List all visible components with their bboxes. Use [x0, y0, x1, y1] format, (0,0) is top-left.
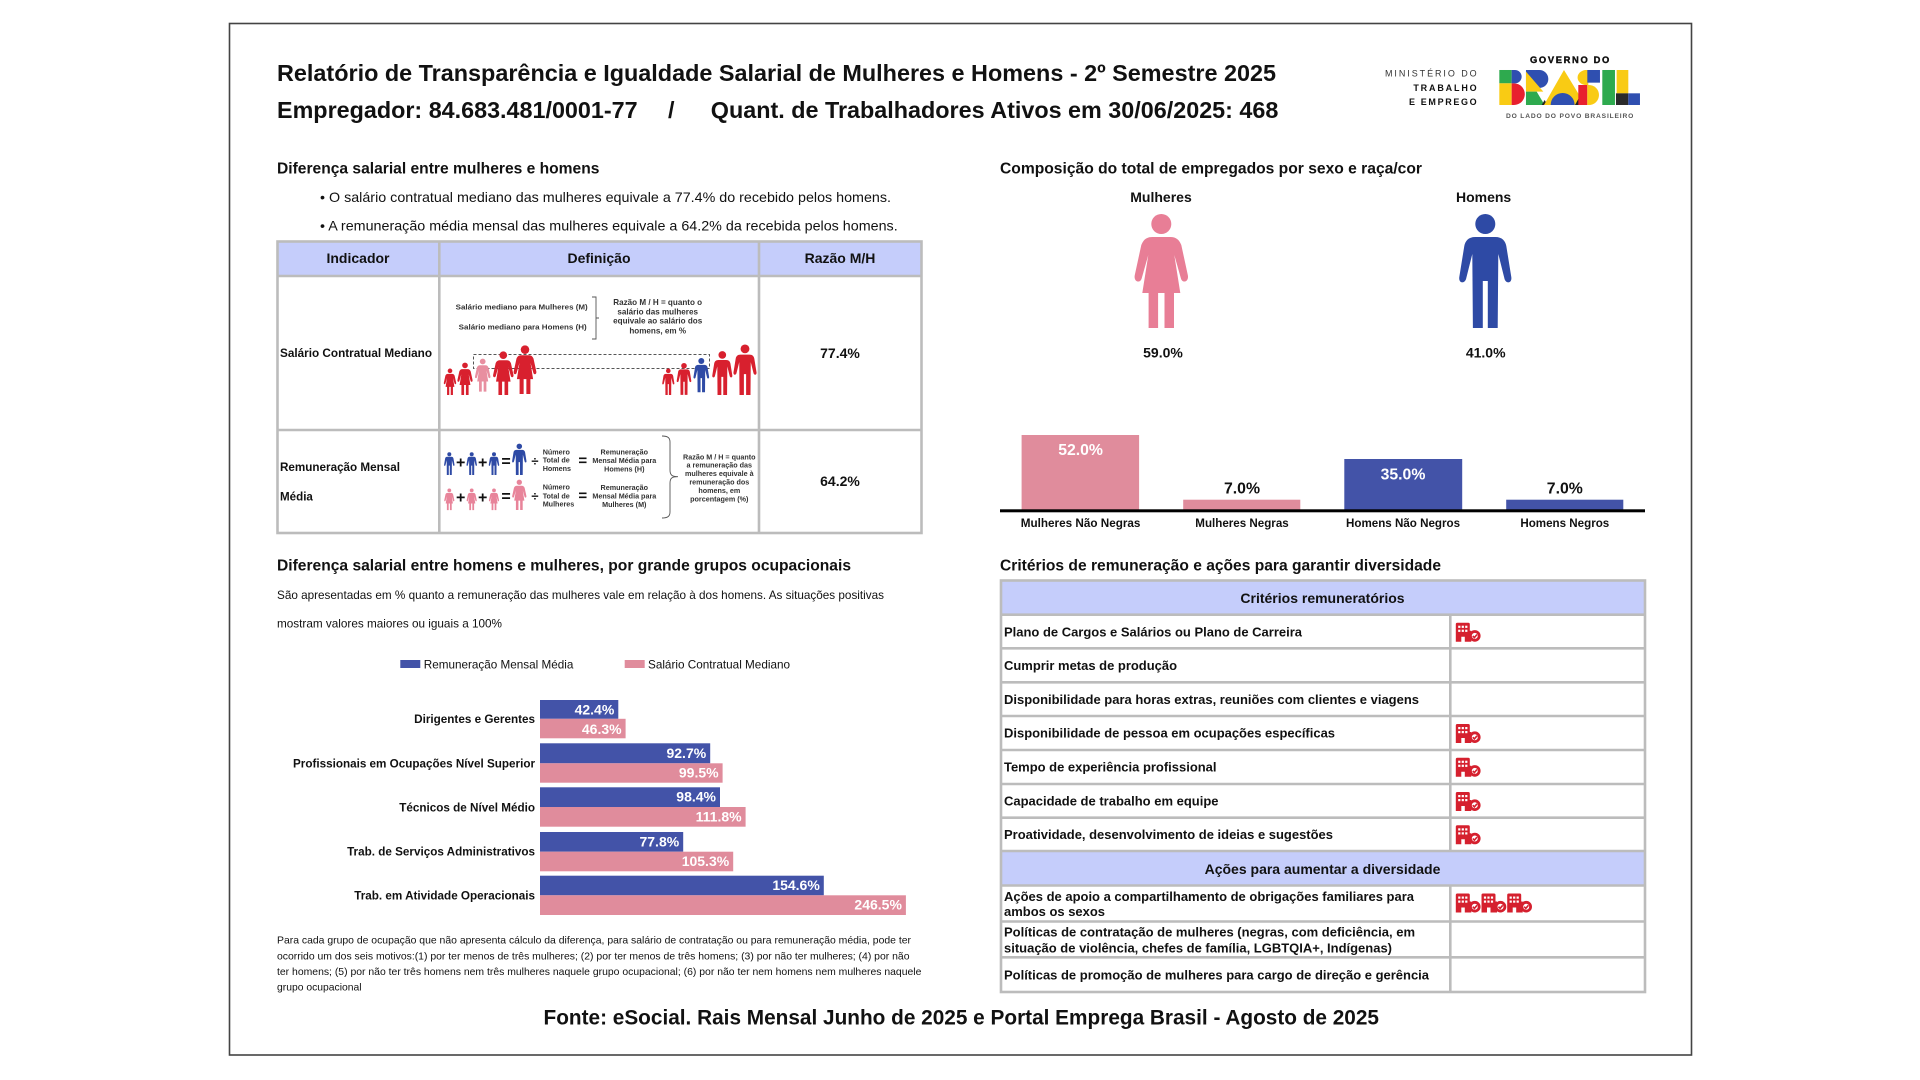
- footer source: Fonte: eSocial. Rais Mensal Junho de 2025 e Portal Emprega Brasil - Agosto de 2025: [544, 1007, 1379, 1030]
- diagram: average pay: Mulheres (M): [602, 500, 647, 509]
- title: Empregador: 84.683.481/0001-77: [277, 97, 638, 123]
- diagram: average pay: homens, em: [698, 486, 740, 495]
- row labels: Média: [280, 490, 313, 504]
- criteria rows: Capacidade de trabalho em equipe: [1004, 793, 1218, 808]
- heading: composition: Composição do total de empregados por sexo e raça/cor: [1000, 160, 1422, 178]
- heading: criteria: Critérios de remuneração e ações para garantir diversidade: [1000, 558, 1441, 574]
- description text: [277, 589, 884, 631]
- label: women: Mulheres: [1130, 189, 1192, 205]
- bar values: 111.8%: [696, 808, 742, 824]
- diagram: average pay: ÷: [531, 454, 539, 468]
- ratio values: 64.2%: [820, 473, 860, 489]
- chart legend: Salário Contratual Mediano: [648, 658, 790, 672]
- table header: Razão M/H: [805, 250, 875, 266]
- action rows: situação de violência, chefes de família, LGBTQIA+, Indígenas): [1004, 941, 1392, 956]
- action icons: company building with check: [1456, 894, 1531, 912]
- diagram: average pay: +: [478, 454, 487, 472]
- diagram: average pay: Remuneração: [601, 483, 649, 492]
- diagram: median salary: Salário mediano para Homens (H): [459, 322, 587, 331]
- bullet text block: • A remuneração média mensal das mulheres equivale a 64.2% da recebida pelos homens.: [320, 218, 898, 234]
- row labels: Salário Contratual Mediano: [280, 347, 432, 360]
- diagram: median salary: [444, 297, 757, 395]
- criteria rows: Disponibilidade de pessoa em ocupações específicas: [1004, 726, 1335, 741]
- bar values: 154.6%: [772, 877, 820, 893]
- table header: actions: Ações para aumentar a diversidade: [1205, 861, 1441, 877]
- panel: occupational groups: [277, 558, 922, 993]
- logo: Ministério do Trabalho e Emprego / Governo do Brasil: DO LADO DO POVO BRASILEIRO: [1506, 113, 1633, 120]
- criteria rows: Disponibilidade para horas extras, reuniões com clientes e viagens: [1004, 692, 1419, 707]
- title: Quant. de Trabalhadores Ativos em 30/06/2025: 468: [711, 97, 1278, 123]
- diagram: average pay: Total de: [543, 456, 570, 465]
- diagram: average pay: Mulheres: [543, 500, 574, 509]
- table header: Indicador: [326, 250, 390, 266]
- diagram: average pay: Número: [543, 483, 570, 492]
- footnote: Para cada grupo de ocupação que não apresenta cálculo da diferença, para salário de contratação ou para remuneração média, pode ter: [277, 936, 912, 947]
- description text: São apresentadas em % quanto a remuneração das mulheres vale em relação à dos homens. As situações positivas: [277, 589, 884, 602]
- diagram: average pay: +: [456, 454, 465, 472]
- action rows: Ações de apoio a compartilhamento de obrigações familiares para: [1004, 889, 1415, 904]
- criteria rows: Tempo de experiência profissional: [1004, 759, 1216, 774]
- value: women share: 59.0%: [1143, 345, 1183, 361]
- diagram: median salary: Razão M / H = quanto o: [613, 298, 702, 307]
- diagram: average pay: mulheres equivale à: [685, 469, 755, 478]
- bar values: 246.5%: [854, 897, 902, 913]
- logo: Ministério do Trabalho e Emprego / Governo do Brasil: GOVERNO DO: [1530, 55, 1609, 65]
- criteria rows: [1004, 624, 1419, 842]
- row labels: [280, 347, 432, 504]
- bar values: 98.4%: [676, 788, 717, 804]
- diagram: average pay: [444, 436, 756, 518]
- column chart: race and sex: [1000, 435, 1645, 530]
- icon: man: [1459, 214, 1511, 328]
- action rows: Políticas de promoção de mulheres para cargo de direção e gerência: [1004, 968, 1430, 983]
- title: [277, 60, 1278, 123]
- diagram: average pay: remuneração dos: [689, 478, 749, 487]
- bar values: 105.3%: [682, 853, 730, 869]
- panel: composition by sex and race: [1000, 160, 1645, 530]
- criteria rows: Proatividade, desenvolvimento de ideias e sugestões: [1004, 827, 1333, 842]
- bar chart: occupational groups: [293, 700, 906, 915]
- table: criteria: [1001, 580, 1645, 992]
- diagram: average pay: Remuneração: [601, 448, 649, 457]
- bar values: 99.5%: [679, 765, 719, 781]
- diagram: average pay: =: [501, 454, 511, 470]
- diagram: median salary: homens, em %: [629, 326, 686, 335]
- label: men: Homens: [1456, 189, 1511, 205]
- heading: occupational groups: Diferença salarial entre homens e mulheres, por grande grupos ocupacionais: [277, 558, 851, 574]
- diagram: average pay: Homens (H): [604, 464, 645, 473]
- logo: Ministério do Trabalho e Emprego / Governo do Brasil: TRABALHO: [1413, 83, 1477, 93]
- footnote: [277, 936, 922, 993]
- column labels: Mulheres Não Negras: [1021, 517, 1140, 530]
- column labels: [1021, 517, 1609, 530]
- value: men share: 41.0%: [1466, 345, 1506, 361]
- category labels: Técnicos de Nível Médio: [399, 801, 535, 814]
- bullet text block: [320, 189, 898, 234]
- table header: [326, 250, 875, 266]
- table: indicators: [278, 242, 922, 533]
- diagram: average pay: =: [578, 488, 587, 504]
- page frame: [230, 24, 1692, 1055]
- criteria rows: Plano de Cargos e Salários ou Plano de Carreira: [1004, 624, 1303, 639]
- bar values: 92.7%: [666, 745, 707, 761]
- diagram: average pay: a remuneração das: [687, 461, 752, 470]
- diagram: average pay: +: [478, 490, 487, 506]
- bar values: 77.8%: [639, 834, 680, 850]
- column values: 52.0%: [1058, 442, 1103, 459]
- bar values: [575, 702, 902, 913]
- diagram: median salary: Salário mediano para Mulheres (M): [456, 303, 588, 312]
- column values: 7.0%: [1547, 480, 1583, 498]
- table header: criteria: Critérios remuneratórios: [1240, 590, 1405, 606]
- title: Relatório de Transparência e Igualdade Salarial de Mulheres e Homens - 2º Semestre 2025: [277, 60, 1276, 86]
- logo: Ministério do Trabalho e Emprego / Governo do Brasil: MINISTÉRIO DO: [1385, 69, 1477, 79]
- chart legend: Remuneração Mensal Média: [424, 658, 574, 672]
- category labels: Trab. de Serviços Administrativos: [347, 846, 535, 859]
- ratio values: 77.4%: [820, 345, 860, 361]
- footnote: grupo ocupacional: [277, 982, 362, 993]
- column values: 7.0%: [1224, 480, 1260, 498]
- diagram: median salary: salário das mulheres: [617, 307, 698, 316]
- bar values: 46.3%: [582, 721, 622, 737]
- column values: 35.0%: [1381, 467, 1425, 484]
- footnote: ocorrido um dos seis motivos:(1) por ter menos de três mulheres; (2) por ter menos de três homens; (3) por não ter mulheres; (4) por não: [277, 951, 910, 962]
- category labels: Trab. em Atividade Operacionais: [354, 890, 535, 903]
- diagram: average pay: Razão M / H = quanto: [683, 452, 756, 461]
- action rows: [1004, 889, 1430, 983]
- panel: salary difference: [277, 160, 922, 533]
- heading: salary difference: Diferença salarial entre mulheres e homens: [277, 160, 600, 178]
- diagram: average pay: +: [456, 490, 465, 506]
- diagram: average pay: porcentagem (%): [690, 495, 749, 504]
- diagram: average pay: =: [578, 452, 587, 470]
- table header: Definição: [567, 250, 631, 266]
- column labels: Homens Negros: [1520, 517, 1609, 530]
- bullet text block: • O salário contratual mediano das mulheres equivale a 77.4% do recebido pelos homens.: [320, 189, 891, 205]
- title: /: [668, 97, 675, 123]
- column labels: Homens Não Negros: [1346, 517, 1460, 530]
- category labels: [293, 713, 535, 903]
- category labels: Dirigentes e Gerentes: [414, 713, 535, 726]
- column labels: Mulheres Negras: [1195, 517, 1289, 530]
- action rows: ambos os sexos: [1004, 904, 1105, 919]
- panel: remuneration criteria and diversity actions: [1000, 558, 1645, 992]
- diagram: average pay: =: [501, 488, 511, 506]
- action rows: Políticas de contratação de mulheres (negras, com deficiência, em: [1004, 925, 1415, 940]
- criteria icons: company building with check: [1456, 623, 1479, 844]
- diagram: average pay: Número: [543, 448, 570, 457]
- logo: Ministério do Trabalho e Emprego / Governo do Brasil: E EMPREGO: [1409, 97, 1477, 107]
- diagram: average pay: Total de: [543, 491, 570, 500]
- category labels: Profissionais em Ocupações Nível Superior: [293, 757, 535, 770]
- diagram: average pay: ÷: [531, 488, 539, 504]
- diagram: average pay: Mensal Média para: [592, 456, 657, 465]
- chart legend: [400, 658, 790, 672]
- icon: woman: [1135, 214, 1188, 328]
- criteria rows: Cumprir metas de produção: [1004, 658, 1177, 673]
- bar values: 42.4%: [575, 702, 615, 718]
- description text: mostram valores maiores ou iguais a 100%: [277, 618, 502, 631]
- ratio values: [820, 345, 860, 489]
- diagram: average pay: Mensal Média para: [592, 491, 657, 500]
- logo: Ministério do Trabalho e Emprego / Governo do Brasil: [1385, 55, 1640, 120]
- row labels: Remuneração Mensal: [280, 461, 400, 474]
- diagram: average pay: Homens: [543, 464, 571, 473]
- footnote: ter homens; (5) por não ter três homens nem três mulheres naquele grupo ocupacional; (6) por não ter nem homens nem mulheres naquele: [277, 967, 922, 978]
- column values: [1058, 442, 1583, 498]
- diagram: median salary: equivale ao salário dos: [613, 317, 703, 326]
